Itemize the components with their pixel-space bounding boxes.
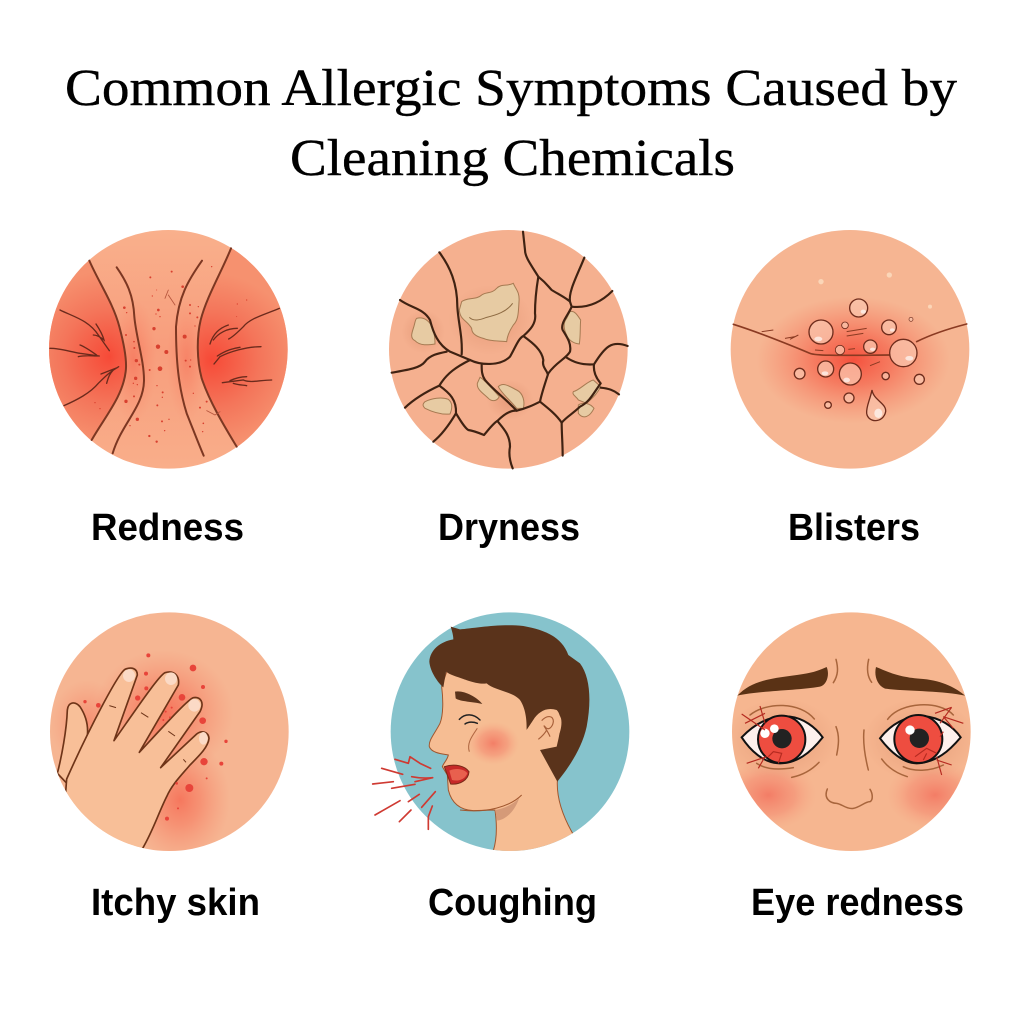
eyebrow xyxy=(455,691,482,704)
blood vessels xyxy=(742,706,963,775)
ear xyxy=(527,710,561,748)
fluid blisters xyxy=(794,299,924,421)
neck shadow xyxy=(495,797,519,821)
panel: blisters xyxy=(731,230,969,469)
label: Eye redness: Eye redness xyxy=(751,882,964,924)
flushed cheek xyxy=(467,722,519,765)
left eye xyxy=(742,716,823,763)
cough lines xyxy=(373,757,435,829)
closed eye xyxy=(459,715,480,724)
cracks xyxy=(50,290,279,415)
hand xyxy=(57,668,209,867)
panel: eye redness xyxy=(720,612,983,851)
title: Cleaning Chemicals xyxy=(290,130,735,187)
panel: coughing xyxy=(373,612,629,867)
panel: dryness xyxy=(389,230,628,469)
flaky patches xyxy=(412,283,601,417)
open mouth xyxy=(444,765,469,784)
face lines xyxy=(750,659,953,808)
label: Dryness: Dryness xyxy=(438,507,580,549)
panel: itchy skin xyxy=(50,612,289,867)
blister highlights xyxy=(814,310,913,418)
right eye xyxy=(880,715,961,763)
red spots xyxy=(94,266,247,443)
label: Redness: Redness xyxy=(91,507,244,549)
eyebrows xyxy=(737,667,965,696)
skin crease xyxy=(733,324,967,355)
title xyxy=(65,60,957,187)
skin cracks xyxy=(392,232,628,468)
panel: redness xyxy=(43,230,297,469)
face and neck xyxy=(428,672,573,851)
title: Common Allergic Symptoms Caused by xyxy=(65,60,957,117)
skin fold lines xyxy=(89,248,237,456)
fingernails xyxy=(123,669,208,745)
label: Blisters: Blisters xyxy=(788,507,920,549)
hair xyxy=(429,625,589,782)
rash dots xyxy=(83,653,228,821)
pale specks xyxy=(818,272,932,309)
infographic canvas xyxy=(49,68,971,923)
label: Coughing: Coughing xyxy=(428,882,597,924)
label: Itchy skin: Itchy skin xyxy=(91,882,260,924)
